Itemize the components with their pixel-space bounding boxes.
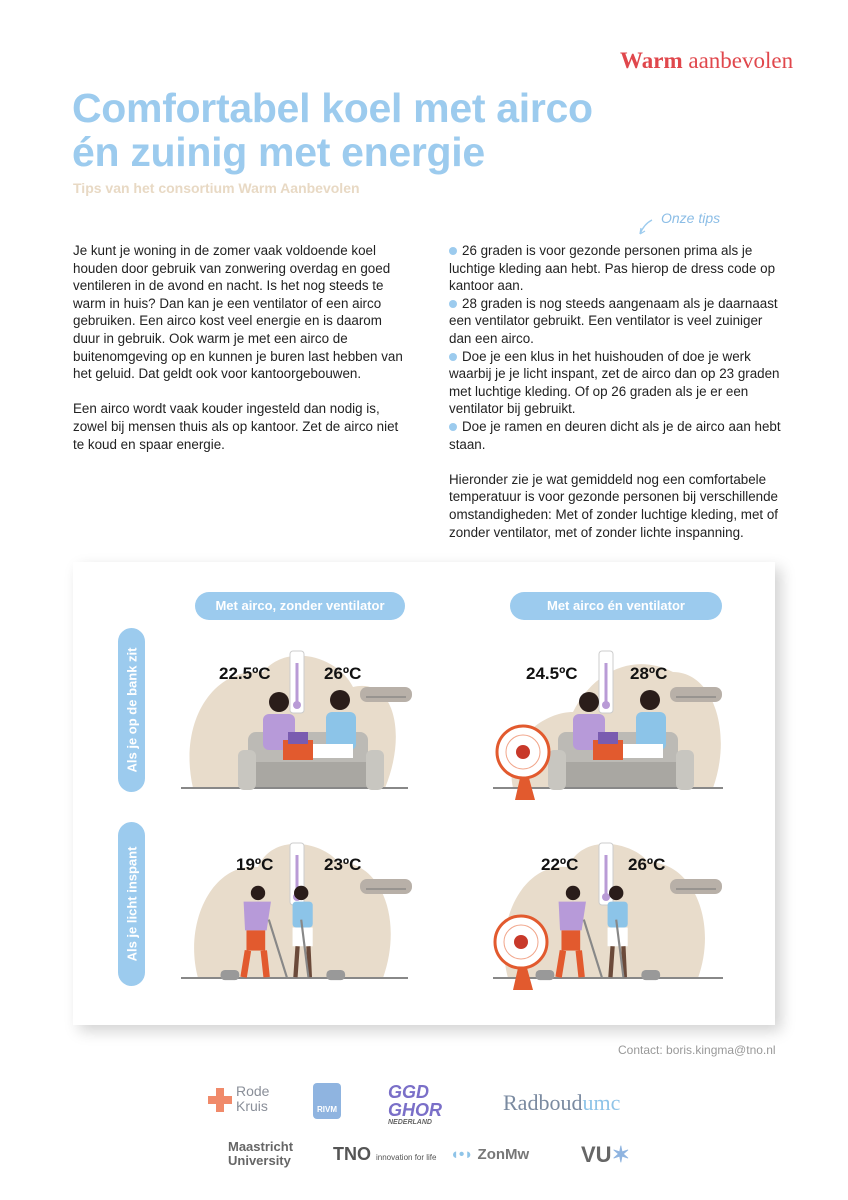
- tips list: Doe je ramen en deuren dicht als je de airco aan hebt staan.: [449, 419, 781, 452]
- scene: effort, with fan: 22ºC: [541, 855, 578, 874]
- column heading: without fan: Met airco, zonder ventilator: [215, 598, 385, 613]
- logo: tno: TNO innovation for life: [333, 1144, 436, 1164]
- logo: radboudumc: Radboudumc: [503, 1090, 620, 1115]
- scene: sitting, with fan: 28ºC: [630, 664, 667, 683]
- logo: maastricht: University: [228, 1153, 291, 1168]
- row label: light effort: [118, 822, 145, 986]
- column heading: with fan: Met airco én ventilator: [547, 598, 685, 613]
- scene: effort, no fan: 19ºC: [236, 855, 273, 874]
- title: [72, 85, 593, 175]
- logo: vu: VU✶: [581, 1142, 630, 1167]
- logos row 2: [228, 1139, 630, 1168]
- subtitle: Tips van het consortium Warm Aanbevolen: [73, 180, 360, 196]
- contact: Contact: boris.kingma@tno.nl: [618, 1043, 776, 1057]
- tips list: 28 graden is nog steeds aangenaam als je daarnaast een ventilator gebruikt. Een ventilator is veel zuiniger dan een airco.: [449, 296, 778, 346]
- logo: maastricht: Maastricht: [228, 1139, 293, 1154]
- logo: rivm: RIVM: [317, 1105, 337, 1114]
- left intro text: Een airco wordt vaak kouder ingesteld dan nodig is, zowel bij mensen thuis als op kantoor. Zet de airco niet te koud en spaar energie.: [73, 401, 398, 452]
- illustrations: [181, 650, 723, 990]
- row label: sitting: [118, 628, 145, 792]
- scene: effort, no fan: [181, 843, 412, 980]
- logo: ggd ghor: GGD: [388, 1082, 429, 1102]
- scene: sitting, no fan: 22.5ºC: [219, 664, 271, 683]
- scene: sitting, no fan: 26ºC: [324, 664, 361, 683]
- logos row 1: Kruis: [236, 1098, 268, 1114]
- panel: temperature comparison: [73, 562, 775, 1025]
- row label: sitting: Als je op de bank zit: [124, 648, 139, 772]
- column heading: with fan: [510, 592, 722, 620]
- left intro text: [73, 243, 403, 452]
- left intro text: Je kunt je woning in de zomer vaak voldoende koel houden door gebruik van zonwering overdag en goed ventileren in de avond en nacht. Is het nog steeds te warm in huis? Dan kan je een ventilator of een airco gebruiken. Een airco kost veel energie en is daarom duur in gebruik. Ook warm je met een airco de buitenomgeving op en kunnen je buren last hebben van het geluid. Dat geldt ook voor kantoorgebouwen.: [73, 243, 403, 381]
- onze tips note: Onze tips: [661, 210, 720, 226]
- scene: sitting, with fan: [493, 651, 723, 800]
- title: én zuinig met energie: [72, 129, 485, 175]
- logo: rode kruis: [208, 1083, 269, 1114]
- tips list: [449, 243, 781, 540]
- tips list: Hieronder zie je wat gemiddeld nog een comfortabele temperatuur is voor gezonde personen bij verschillende omstandigheden: Met of zonder luchtige kleding, met of zonder ventilator, met of zonder lichte inspanning.: [449, 472, 778, 540]
- scene: effort, with fan: [493, 843, 723, 990]
- tips list: 26 graden is voor gezonde personen prima als je luchtige kleding aan hebt. Pas hierop de dress code op kantoor aan.: [449, 243, 775, 293]
- logos row 1: Rode: [236, 1083, 269, 1099]
- logo: zonmw: ◖•◗ ZonMw: [450, 1146, 529, 1163]
- logo: ggd ghor: NEDERLAND: [388, 1119, 432, 1126]
- scene: sitting, no fan: [181, 651, 412, 790]
- scene: sitting, with fan: 24.5ºC: [526, 664, 578, 683]
- row label: light effort: Als je licht inspant: [124, 847, 139, 961]
- logo: rivm: [313, 1083, 341, 1119]
- logo: maastricht: [228, 1139, 293, 1168]
- logo: ggd ghor: GHOR: [388, 1100, 442, 1120]
- scene: effort, with fan: 26ºC: [628, 855, 665, 874]
- column heading: without fan: [195, 592, 405, 620]
- title: Comfortabel koel met airco: [72, 85, 593, 131]
- tips list: Doe je een klus in het huishouden of doe je werk waarbij je je licht inspant, zet de airco dan op 23 graden met luchtige kleding. Of op 26 graden als je er een ventilator bij gebruikt.: [449, 349, 780, 416]
- onze tips note: [639, 210, 720, 234]
- scene: effort, no fan: 23ºC: [324, 855, 361, 874]
- logos row 1: [208, 1082, 620, 1126]
- logo: ggd ghor: [388, 1082, 442, 1126]
- brand logo: Warm aanbevolen: [620, 48, 793, 73]
